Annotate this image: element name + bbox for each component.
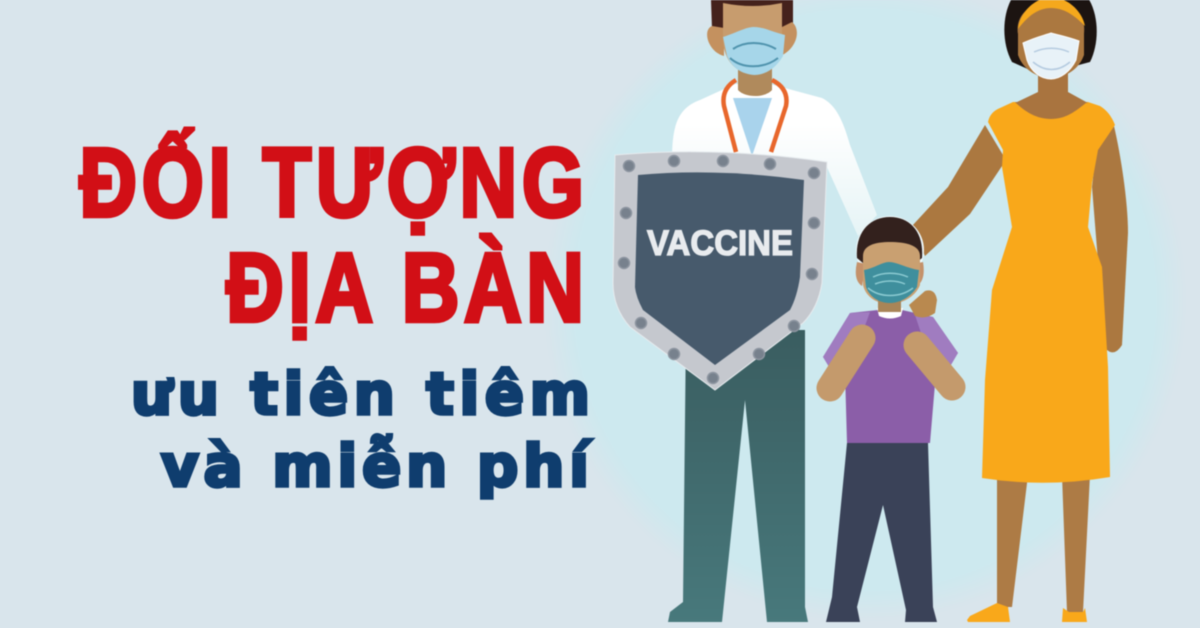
mother's hand on shoulder [909, 290, 937, 317]
neck [878, 298, 901, 312]
surgical mask [723, 27, 785, 75]
child left arm [830, 338, 862, 388]
mother figure [912, 0, 1128, 622]
shield rivets [618, 156, 820, 384]
hair [1004, 0, 1097, 70]
mask pleats [1033, 48, 1070, 70]
child trousers [826, 443, 937, 622]
headband [1018, 0, 1085, 29]
mother shoes [967, 603, 1087, 622]
child collar [877, 308, 903, 318]
ears [856, 262, 924, 286]
hair [711, 0, 793, 30]
head halo [856, 216, 924, 284]
doctor trousers [668, 330, 808, 622]
mother right arm [1092, 122, 1128, 352]
child sleeves [823, 312, 958, 372]
shield label: VACCINE [647, 224, 793, 263]
doctor coat [672, 84, 877, 236]
teal mask [864, 262, 919, 303]
orange dress [982, 102, 1115, 483]
face [1018, 2, 1084, 78]
doctor shirt [733, 98, 772, 156]
mask pleats [730, 43, 778, 66]
mother head [1004, 0, 1097, 103]
title [80, 129, 592, 500]
heading line 1: ĐỐI TƯỢNG [80, 129, 584, 237]
heading line 2: ĐỊA BÀN [226, 234, 584, 342]
shield frame [613, 152, 827, 390]
mother neckline [1015, 102, 1087, 119]
white mask [1023, 33, 1079, 79]
mask pleats [868, 273, 913, 296]
subheading line 2: và miễn phí [161, 432, 592, 500]
face [723, 3, 782, 74]
doctor head [707, 0, 797, 75]
child head [856, 216, 924, 312]
lanyard [724, 80, 786, 152]
shield face [635, 172, 804, 365]
hair [857, 217, 922, 264]
shield [613, 152, 827, 390]
face [863, 242, 920, 304]
child figure [823, 216, 958, 622]
ears [707, 22, 797, 56]
child shirt [823, 310, 958, 443]
mother left arm [912, 125, 1006, 256]
doctor neck [738, 68, 772, 96]
neck [1015, 70, 1088, 103]
mother legs [997, 475, 1090, 612]
background circle [543, 0, 1187, 622]
child right arm [917, 345, 952, 387]
subheading line 1: ưu tiên tiêm [131, 360, 590, 428]
doctor figure [668, 0, 877, 622]
